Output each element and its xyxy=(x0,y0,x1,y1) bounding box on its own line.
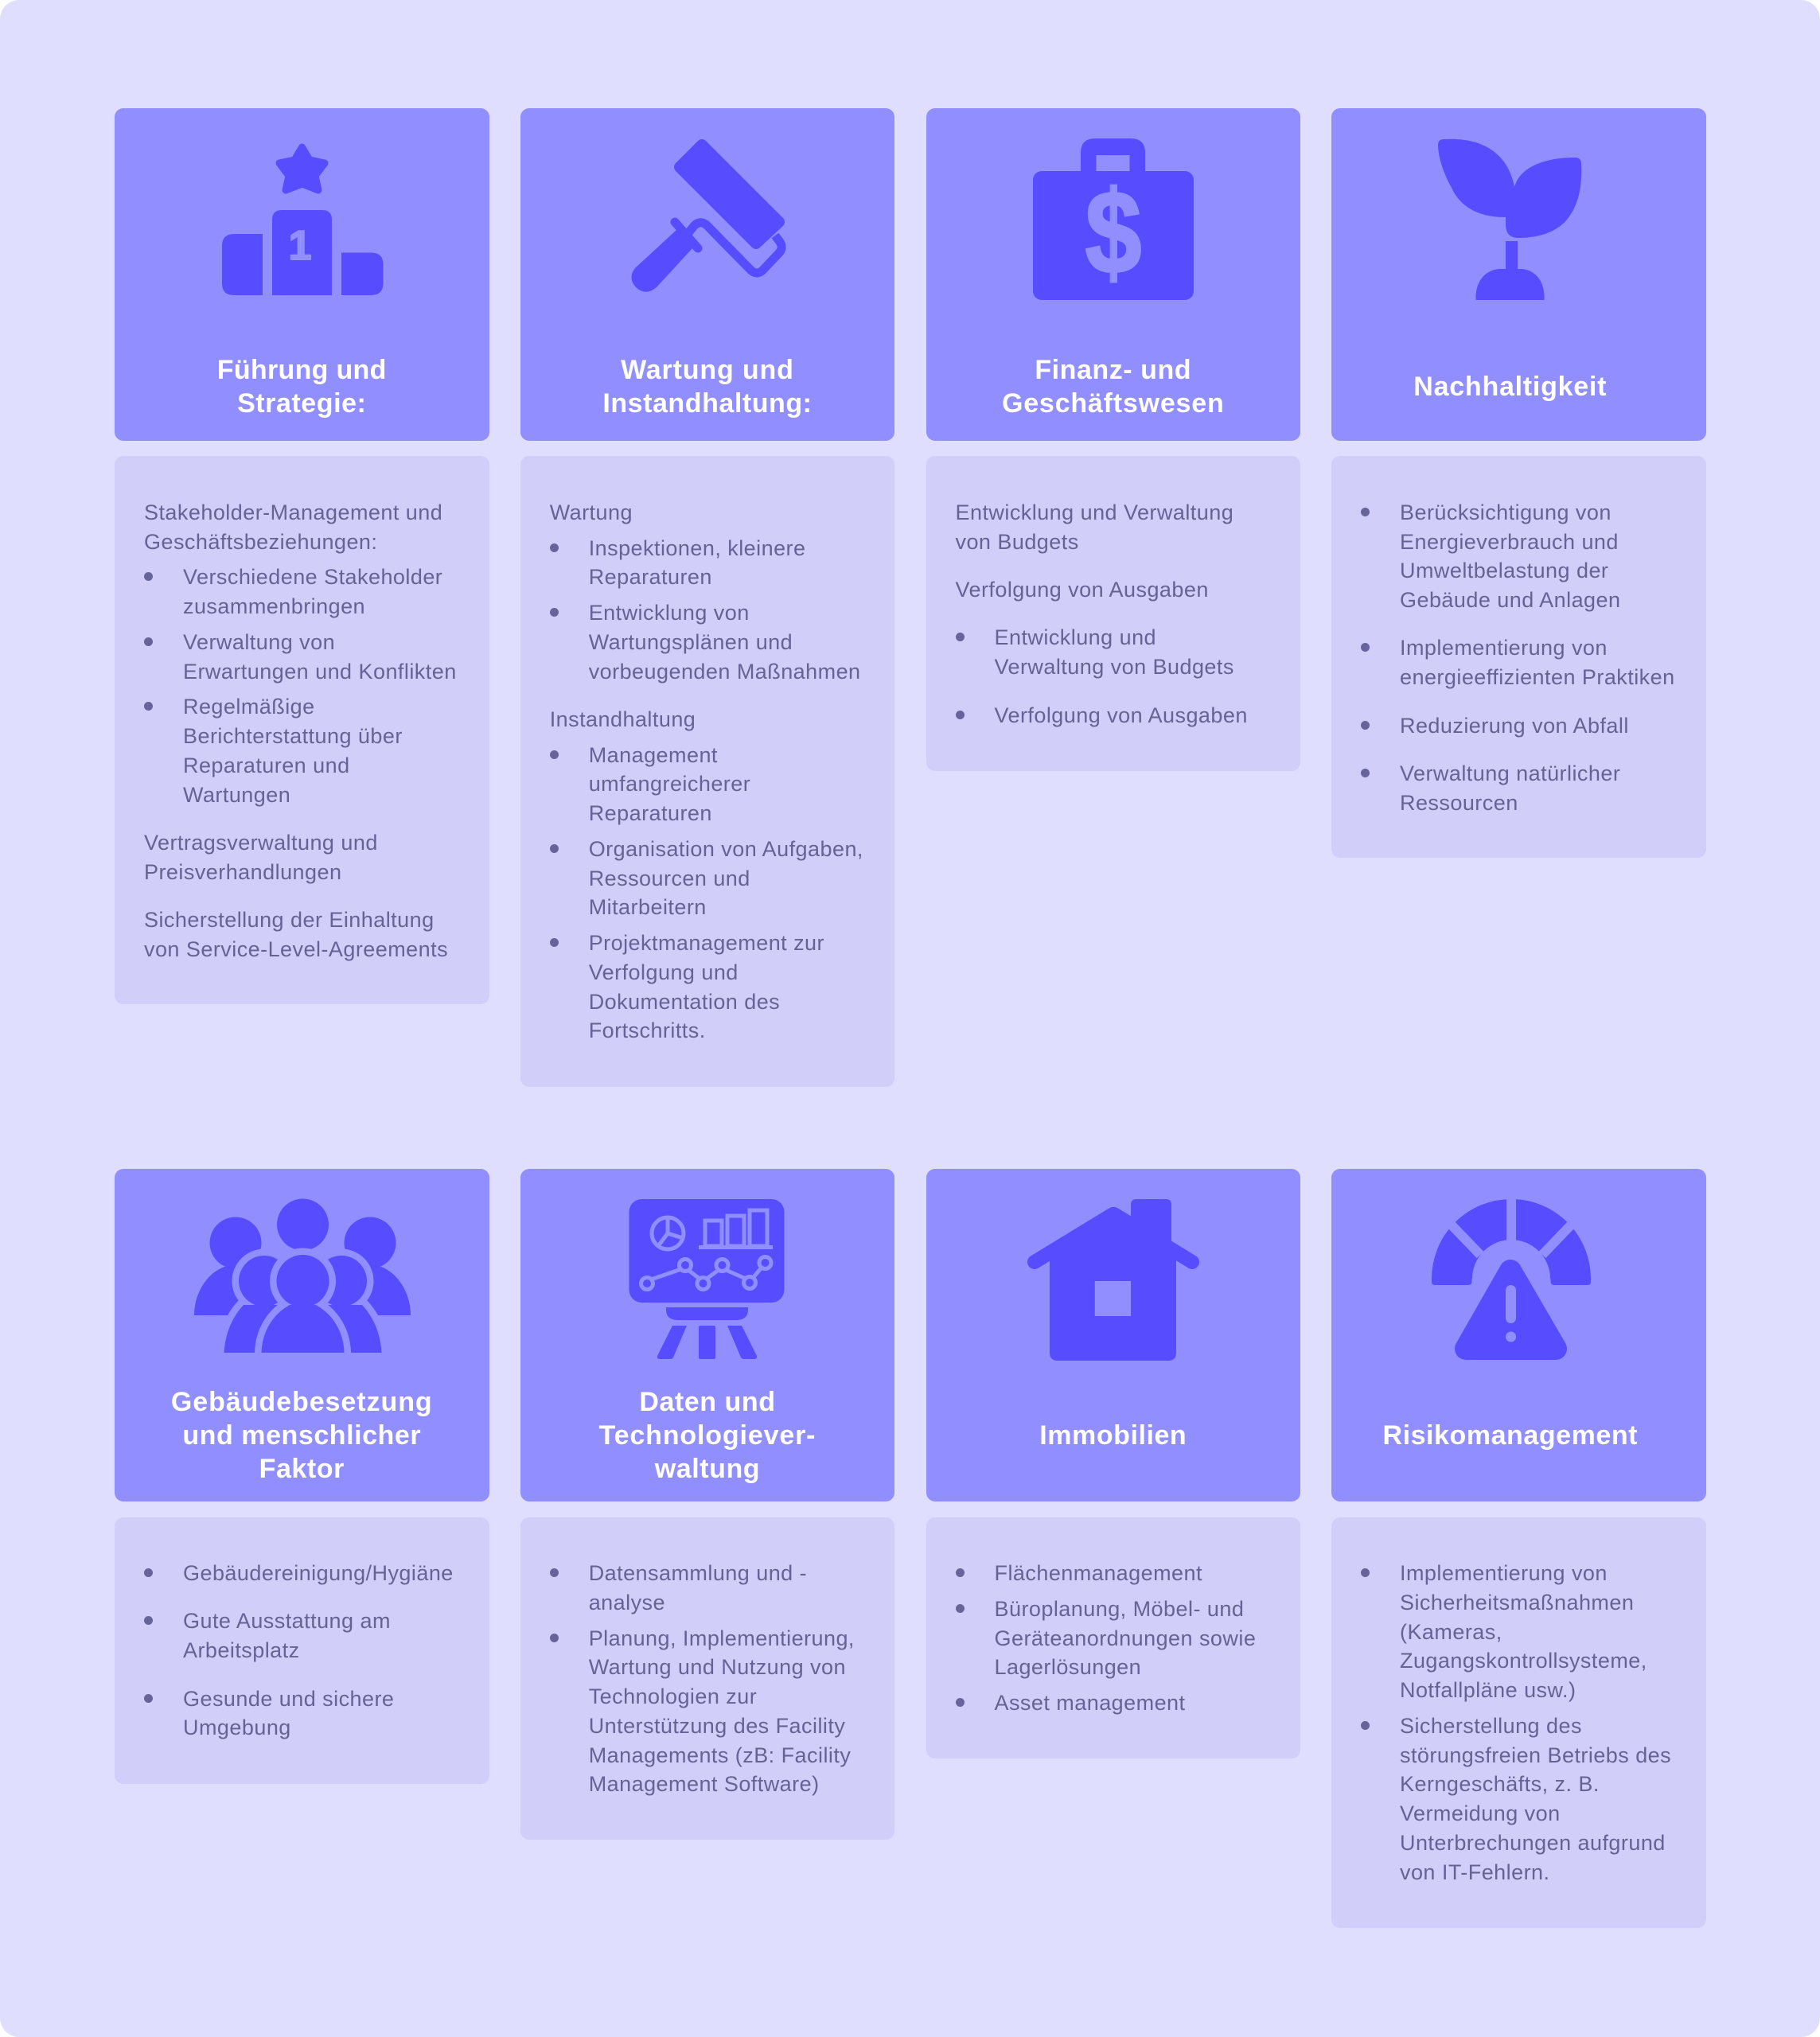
bullet: Unterbrechungen aufgrund xyxy=(1400,1831,1666,1855)
panel: Immobilien content xyxy=(926,1517,1300,1759)
text block xyxy=(144,500,442,554)
heading: Gebäudebesetzung xyxy=(171,1387,433,1417)
icon: podium with star: 1 xyxy=(289,223,311,269)
bullet: Wartungsplänen und xyxy=(589,630,793,654)
heading: Instandhaltung: xyxy=(602,388,813,419)
bullet: Umweltbelastung der xyxy=(1400,559,1608,582)
panel: Nachhaltigkeit header xyxy=(1331,108,1706,441)
panel: Führung und Strategie content xyxy=(115,456,489,1004)
bullet: Dokumentation des xyxy=(589,990,780,1014)
heading: waltung xyxy=(655,1454,760,1484)
icon: group of people xyxy=(194,1198,411,1353)
bullet: Projektmanagement zur xyxy=(589,931,824,955)
bullet: Umgebung xyxy=(183,1716,291,1739)
icon: house xyxy=(1027,1199,1199,1361)
bullet: Wartung und Nutzung von xyxy=(589,1655,846,1679)
heading: und menschlicher xyxy=(182,1420,421,1451)
text block xyxy=(144,908,448,961)
heading: Geschäftswesen xyxy=(1002,388,1225,419)
bullet: Entwicklung und xyxy=(995,625,1156,649)
bullet: Entwicklung von xyxy=(589,601,750,625)
bullet: Arbeitsplatz xyxy=(183,1638,300,1662)
text block: Geschäftsbeziehungen: xyxy=(144,530,377,554)
panel: Wartung und Instandhaltung content xyxy=(520,456,894,1087)
bullet xyxy=(1361,1561,1647,1702)
bullet: vorbeugenden Maßnahmen xyxy=(589,660,861,684)
bullet: Lagerlösungen xyxy=(995,1655,1141,1679)
bullet: Unterstützung des Facility xyxy=(589,1714,845,1738)
text block: Verfolgung von Ausgaben xyxy=(955,578,1209,602)
panel: Gebäudebesetzung content xyxy=(115,1517,489,1784)
bullet: Vermeidung von xyxy=(1400,1801,1561,1825)
bullet: Ressourcen und xyxy=(589,867,750,890)
text block: Instandhaltung xyxy=(550,707,696,731)
bullet: Organisation von Aufgaben, xyxy=(589,837,863,861)
heading: Technologiever- xyxy=(599,1420,816,1451)
bullet: Kerngeschäfts, z. B. xyxy=(1400,1772,1600,1796)
heading: Wartung und xyxy=(621,355,794,385)
bullet: Gesunde und sichere xyxy=(183,1687,394,1711)
bullet xyxy=(1361,636,1675,689)
bullet: Planung, Implementierung, xyxy=(589,1626,855,1650)
bullet: Reduzierung von Abfall xyxy=(1400,714,1629,738)
bullet xyxy=(1361,1712,1706,1887)
heading: Finanz- und xyxy=(1035,355,1191,385)
text block: Entwicklung und Verwaltung xyxy=(955,500,1233,524)
bullet: analyse xyxy=(589,1591,665,1614)
text block: Sicherstellung der Einhaltung xyxy=(144,908,435,932)
bullet xyxy=(144,1687,394,1739)
text block xyxy=(144,831,378,884)
bullet: Flächenmanagement xyxy=(995,1561,1202,1585)
bullet: zusammenbringen xyxy=(183,594,365,618)
heading xyxy=(598,1387,816,1484)
bullet: (Kameras, xyxy=(1400,1620,1502,1644)
bullet: Verfolgung und xyxy=(589,960,739,984)
bullet: Verwaltung von xyxy=(183,630,335,654)
bullet: Asset management xyxy=(995,1691,1185,1715)
bullet: Verschiedene Stakeholder xyxy=(183,565,442,589)
bullet: umfangreicherer xyxy=(589,772,750,796)
text block: Stakeholder-Management und xyxy=(144,500,442,524)
bullet xyxy=(550,931,824,1042)
text block: Vertragsverwaltung und xyxy=(144,831,378,855)
bullet: Ressourcen xyxy=(1400,791,1518,815)
bullet: Mitarbeitern xyxy=(589,895,707,919)
bullet: von IT-Fehlern. xyxy=(1400,1860,1549,1884)
bullet xyxy=(144,695,403,807)
bullet xyxy=(550,1626,855,1796)
panel: Risikomanagement content xyxy=(1331,1517,1706,1928)
bullet xyxy=(956,625,1234,679)
bullet xyxy=(550,601,861,684)
bullet: Notfallpläne usw.) xyxy=(1400,1678,1576,1702)
heading: Risikomanagement xyxy=(1382,1420,1638,1451)
bullet: Geräteanordnungen sowie xyxy=(995,1626,1256,1650)
bullet xyxy=(956,1597,1256,1679)
heading: Faktor xyxy=(259,1454,345,1484)
heading: Führung und xyxy=(217,355,387,385)
bullet xyxy=(550,536,805,589)
bullet: Inspektionen, kleinere xyxy=(589,536,805,560)
bullet: Management xyxy=(589,743,718,767)
heading: Daten und xyxy=(639,1387,776,1417)
bullet xyxy=(550,1561,807,1614)
panel: Finanz- und Geschäftswesen content xyxy=(926,456,1300,771)
heading: Strategie: xyxy=(237,388,366,419)
panel: Immobilien header xyxy=(926,1169,1300,1501)
panel: Finanz- und Geschäftswesen header xyxy=(926,108,1300,441)
bullet xyxy=(144,1609,391,1662)
bullet: Gebäude und Anlagen xyxy=(1400,588,1620,612)
bullet: Technologien zur xyxy=(589,1685,757,1708)
panel: Risikomanagement header xyxy=(1331,1169,1706,1501)
panel: Wartung und Instandhaltung header xyxy=(520,108,894,441)
panel: Daten und Technologieverwaltung header xyxy=(520,1169,894,1501)
bullet: Managements (zB: Facility xyxy=(589,1743,851,1766)
bullet: Erwartungen und Konflikten xyxy=(183,660,457,684)
icon: presentation board xyxy=(629,1199,785,1359)
bullet: Sicherstellung des xyxy=(1400,1714,1582,1738)
bullet: Implementierung von xyxy=(1400,636,1608,660)
bullet: Reparaturen xyxy=(589,565,712,589)
bullet: Gute Ausstattung am xyxy=(183,1609,391,1633)
icon: podium with star xyxy=(222,143,384,295)
panel: Nachhaltigkeit content xyxy=(1331,456,1706,858)
panel: Gebäudebesetzung header xyxy=(115,1169,489,1501)
bullet: Reparaturen xyxy=(589,801,712,825)
bullet: Datensammlung und - xyxy=(589,1561,807,1585)
text block: von Budgets xyxy=(955,530,1079,554)
bullet xyxy=(1361,761,1620,815)
text block: Preisverhandlungen xyxy=(144,860,341,884)
heading xyxy=(602,355,813,419)
heading xyxy=(217,355,387,419)
bullet: Zugangskontrollsysteme, xyxy=(1400,1649,1647,1673)
bullet: Fortschritts. xyxy=(589,1018,706,1042)
bullet: Implementierung von xyxy=(1400,1561,1608,1585)
bullet: Wartungen xyxy=(183,783,290,807)
bullet: Berücksichtigung von xyxy=(1400,500,1611,524)
bullet: störungsfreien Betriebs des xyxy=(1400,1743,1671,1766)
heading xyxy=(1002,355,1225,419)
text block: von Service-Level-Agreements xyxy=(144,937,448,961)
bullet: Verfolgung von Ausgaben xyxy=(995,703,1248,727)
bullet xyxy=(1361,500,1620,612)
heading: Nachhaltigkeit xyxy=(1413,372,1607,402)
panel: Daten und Technologieverwaltung content xyxy=(520,1517,894,1840)
icon: plant xyxy=(1438,138,1582,300)
bullet: Sicherheitsmaßnahmen xyxy=(1400,1591,1634,1614)
bullet: Energieverbrauch und xyxy=(1400,530,1619,554)
bullet xyxy=(550,837,863,919)
icon: paint roller xyxy=(632,139,786,292)
bullet: Verwaltung natürlicher xyxy=(1400,761,1620,785)
bullet: Büroplanung, Möbel- und xyxy=(995,1597,1244,1621)
heading: Immobilien xyxy=(1039,1420,1187,1451)
bullet: Reparaturen und xyxy=(183,754,350,777)
panel: Führung und Strategie header xyxy=(115,108,489,441)
bullet: Management Software) xyxy=(589,1772,820,1796)
text block xyxy=(955,500,1233,554)
bullet xyxy=(550,743,750,825)
icon: briefcase with dollar: $ xyxy=(1085,167,1141,298)
bullet: Regelmäßige xyxy=(183,695,315,719)
icon: risk gauge with warning triangle xyxy=(1432,1199,1591,1360)
text block: Wartung xyxy=(550,500,633,524)
heading xyxy=(171,1387,433,1484)
bullet: energieeffizienten Praktiken xyxy=(1400,665,1675,689)
bullet xyxy=(144,630,457,684)
bullet xyxy=(144,565,442,618)
icon: briefcase with dollar xyxy=(1033,138,1194,300)
bullet: Berichterstattung über xyxy=(183,724,403,748)
bullet: Gebäudereinigung/Hygiäne xyxy=(183,1561,454,1585)
bullet: Verwaltung von Budgets xyxy=(995,655,1234,679)
